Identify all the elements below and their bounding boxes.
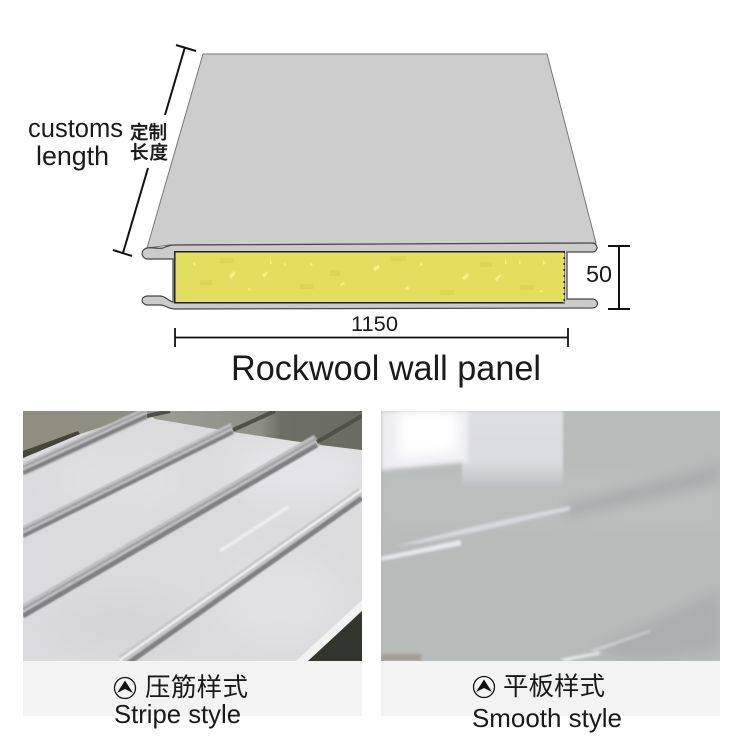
glossy streaks xyxy=(381,506,650,661)
label: 定制长度: 长度 xyxy=(130,139,168,165)
sheet shading xyxy=(248,449,352,492)
lower right edge xyxy=(296,600,362,661)
dimension: thickness 50 xyxy=(586,246,630,309)
glare xyxy=(220,507,288,551)
chinese caption: 压筋样式 xyxy=(145,667,248,704)
dimension: width 1150: 1150 xyxy=(351,313,398,336)
ribs xyxy=(23,410,362,664)
label: customs length xyxy=(28,115,123,171)
title: Rockwool wall panel xyxy=(231,349,541,388)
english caption: Stripe style xyxy=(114,701,241,729)
label: customs length: length xyxy=(36,141,109,171)
label: 定制长度: 定制 xyxy=(130,119,167,145)
caption: smooth style xyxy=(381,661,720,733)
icon: circled arrow xyxy=(114,678,136,698)
wall reflection xyxy=(381,411,564,485)
caption: stripe style xyxy=(23,661,362,729)
dark shadow under sheet edge xyxy=(23,431,80,458)
english caption: Smooth style xyxy=(472,703,622,733)
caption band xyxy=(23,661,362,716)
darker shadow bands xyxy=(565,465,720,661)
dimension: thickness 50: 50 xyxy=(586,261,612,287)
dimension: custom length bracket xyxy=(113,45,196,256)
panel diagram xyxy=(142,54,598,309)
rib tails beyond sheet xyxy=(147,411,362,442)
rockwool core xyxy=(174,251,565,304)
label: customs length: customs xyxy=(28,115,123,143)
chinese caption: 平板样式 xyxy=(503,666,605,703)
panel top face xyxy=(147,54,596,248)
label: 定制长度 xyxy=(130,119,168,165)
photo: stripe style panel xyxy=(23,410,370,664)
background behind sheet xyxy=(23,411,362,458)
caption band xyxy=(381,661,720,716)
photo: smooth style panel xyxy=(381,411,720,661)
icon: circled arrow xyxy=(474,676,494,698)
floor debris xyxy=(381,654,421,661)
panel cross-section profile xyxy=(142,243,598,309)
